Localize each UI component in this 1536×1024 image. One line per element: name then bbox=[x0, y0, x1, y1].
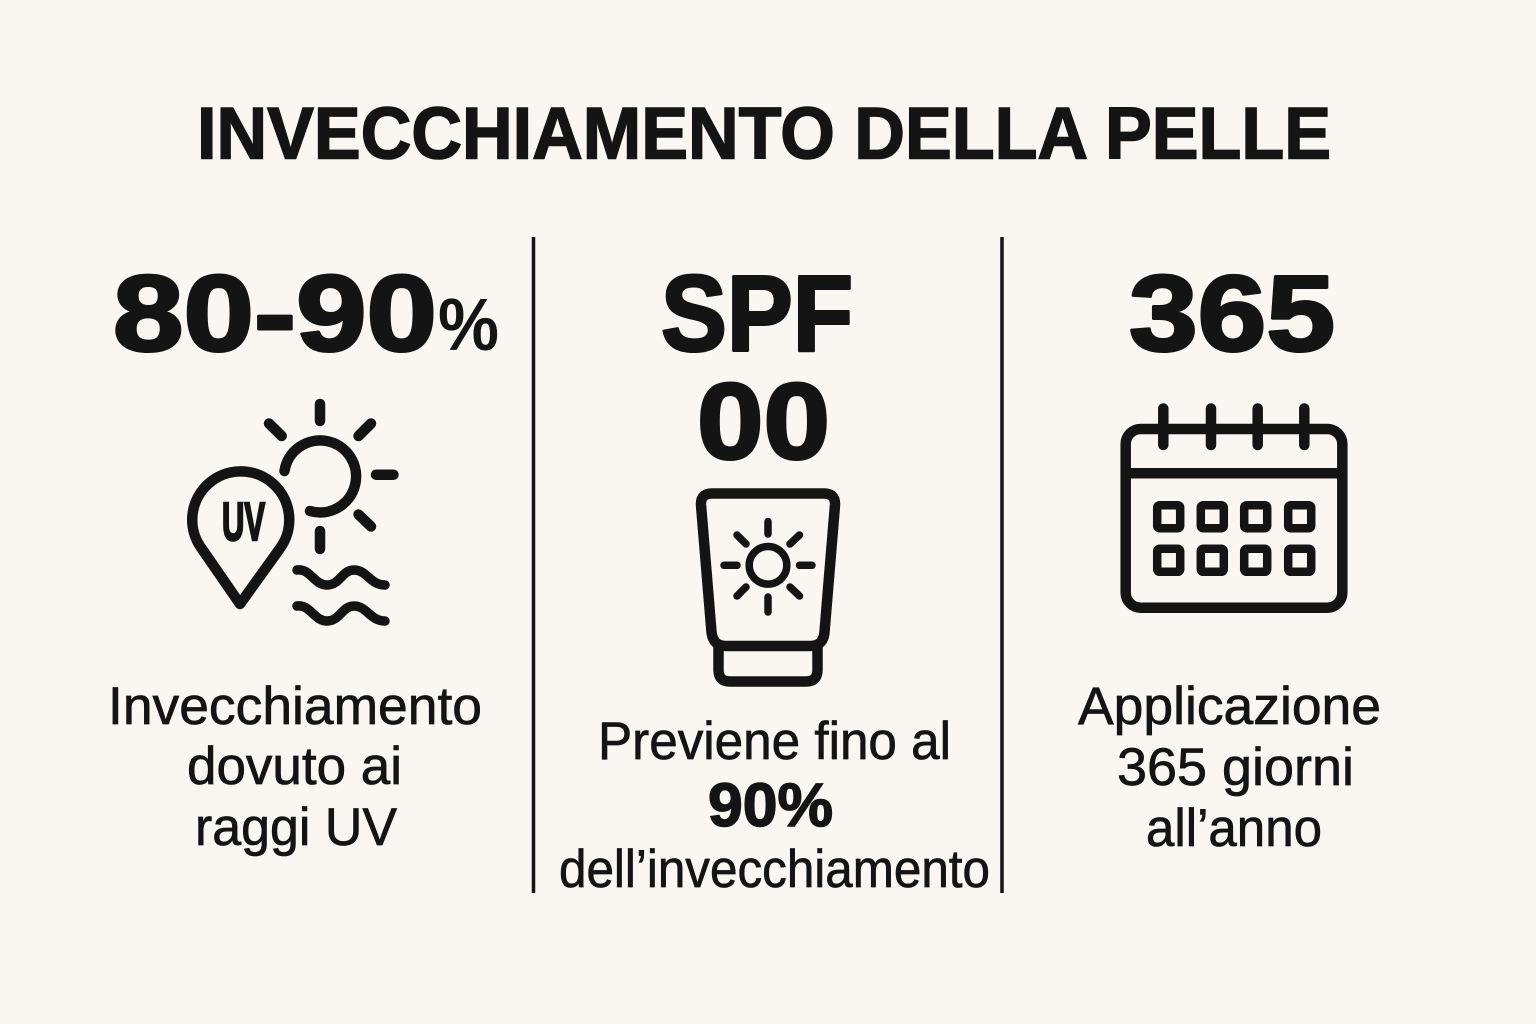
panel: sunscreen bbox=[559, 252, 990, 899]
stat: SPF 00: 00 bbox=[697, 360, 830, 482]
caption: daily application: all’anno bbox=[1146, 799, 1322, 858]
icon: sunscreen tube bbox=[701, 494, 835, 682]
caption: UV ageing: raggi UV bbox=[195, 798, 398, 857]
stat: SPF 00 bbox=[661, 252, 853, 482]
stat: SPF 00: SPF bbox=[661, 252, 853, 374]
panel: daily application bbox=[1078, 252, 1381, 858]
caption: UV ageing: Invecchiamento bbox=[108, 677, 482, 736]
caption: UV ageing: dovuto ai bbox=[187, 737, 402, 796]
stat: 365: 365 bbox=[1129, 252, 1335, 374]
caption: sunscreen prevention: 90% bbox=[708, 771, 833, 839]
caption: daily application: Applicazione bbox=[1078, 677, 1381, 736]
stat: 80-90%: % bbox=[438, 283, 499, 366]
caption: sunscreen prevention: dell’invecchiamento bbox=[559, 840, 990, 899]
caption: daily application: 365 giorni bbox=[1117, 738, 1354, 797]
caption: sunscreen prevention bbox=[559, 712, 990, 899]
caption: sunscreen prevention: Previene fino al bbox=[598, 712, 951, 771]
stat: 80-90%: 80-90 bbox=[113, 252, 437, 374]
icon: calendar bbox=[1126, 408, 1342, 608]
icon: sun, UV pin and waves: UV bbox=[222, 492, 265, 552]
caption: UV ageing bbox=[108, 677, 482, 857]
caption: daily application bbox=[1078, 677, 1381, 858]
icon: sun, UV pin and waves bbox=[192, 404, 394, 621]
title: INVECCHIAMENTO DELLA PELLE bbox=[197, 94, 1331, 174]
panel: UV ageing bbox=[108, 252, 499, 857]
